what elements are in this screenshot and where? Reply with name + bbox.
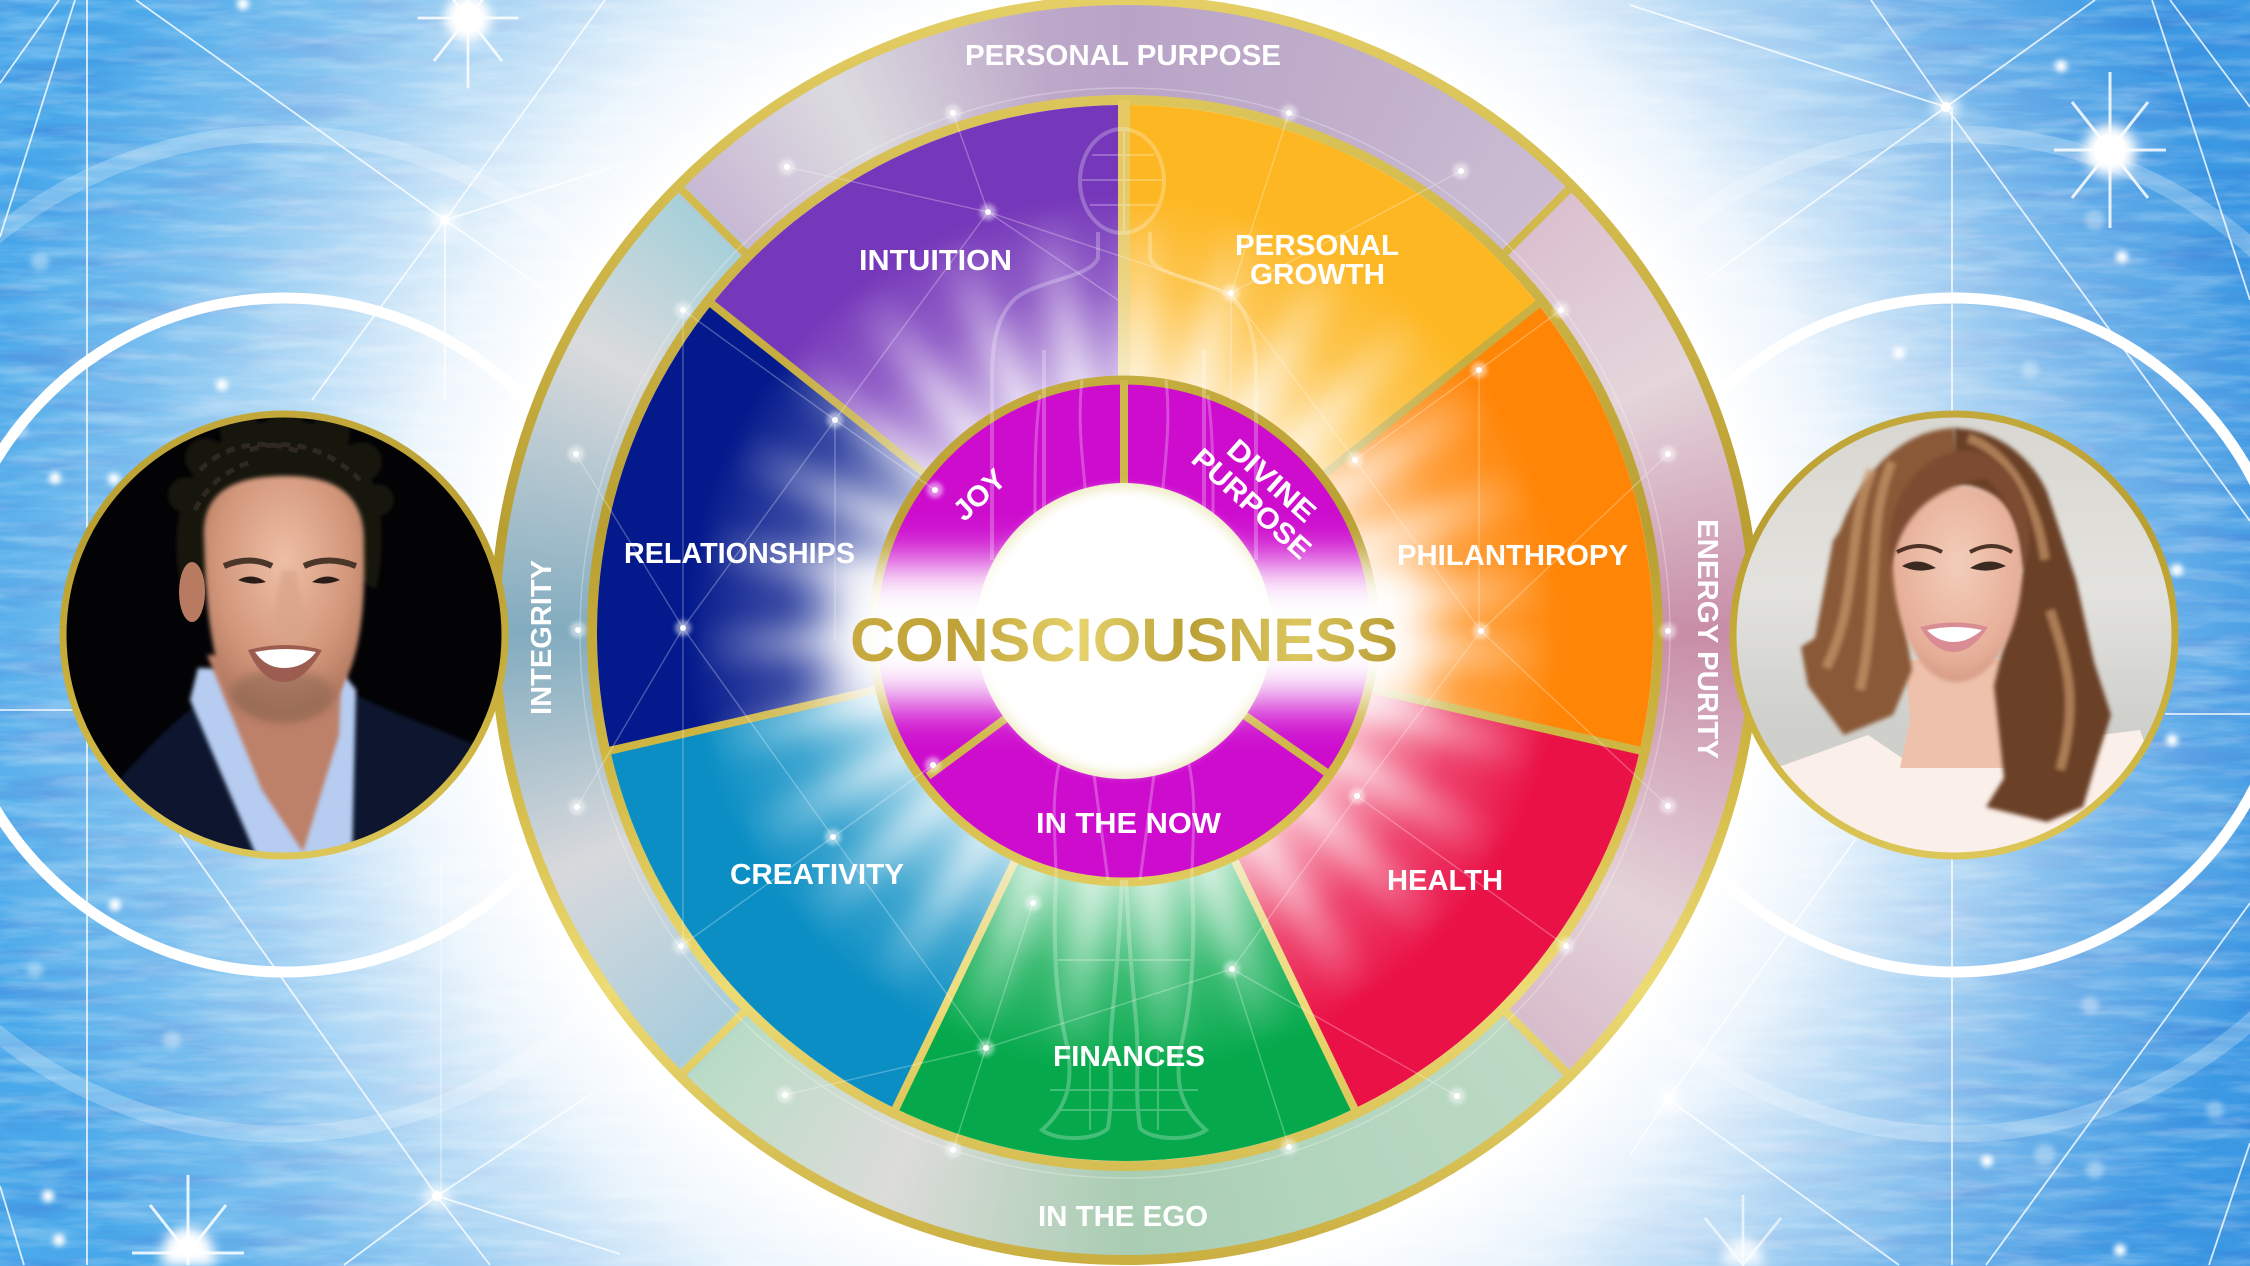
segment: creativity: [610, 633, 1125, 1109]
segment: intuition: [712, 105, 1125, 633]
seven colored segments: [597, 105, 1653, 1161]
label: energy purity: ENERGY PURITY: [1691, 519, 1723, 759]
label: consciousness: CONSCIOUSNESS: [850, 606, 1398, 674]
label: personal purpose: PERSONAL PURPOSE: [965, 40, 1281, 72]
white rings around portraits: [0, 298, 2250, 972]
radiating light streaks: [785, 293, 1465, 973]
label: health: HEALTH: [1387, 865, 1503, 897]
outer ring gold borders and separators: [495, 0, 1755, 1260]
label: in the now: IN THE NOW: [1036, 808, 1222, 840]
label: divine purpose: DIVINE: [1220, 433, 1322, 529]
hair right lobe: [1954, 428, 2111, 822]
nose shade: [278, 570, 298, 604]
stubble: [230, 669, 334, 721]
hair left lobe: [1801, 428, 1960, 735]
pale wide arcs: [0, 134, 2250, 1134]
jacket: [120, 694, 472, 850]
label: finances: FINANCES: [1053, 1041, 1205, 1073]
ear: [179, 562, 205, 622]
wheel gold rim: [592, 100, 1658, 1166]
eyes: [1902, 561, 2006, 571]
bottom right star, cut by page edge: [1723, 1238, 1763, 1266]
label: creativity: CREATIVITY: [730, 859, 904, 891]
constellation overlay on wheel: [568, 88, 1676, 1178]
label: personal growth: [1235, 230, 1399, 291]
brows: [224, 560, 356, 566]
segment: finances: [896, 633, 1354, 1161]
white inner circle: [976, 483, 1272, 779]
label: in the ego: IN THE EGO: [1038, 1201, 1208, 1233]
white light band across center: [835, 563, 1420, 702]
top: [1760, 730, 2190, 870]
hub dividers: [928, 380, 1330, 776]
eyes: [238, 576, 340, 584]
neck: [207, 655, 342, 852]
shirt: [190, 668, 356, 860]
segment dividers: [604, 100, 1646, 1114]
fringe: [1888, 450, 2029, 570]
brows: [1897, 546, 2012, 552]
hair highlights: [1826, 438, 2070, 770]
segment: relationships: [597, 304, 1125, 750]
label: relationships: RELATIONSHIPS: [624, 538, 855, 570]
label: integrity: INTEGRITY: [526, 560, 558, 715]
label: intuition: INTUITION: [859, 245, 1012, 277]
hair texture: [195, 445, 360, 510]
label: philanthropy: PHILANTHROPY: [1397, 540, 1628, 572]
label: personal growth: PERSONAL: [1235, 230, 1399, 262]
portrait: woman: [1730, 410, 2190, 870]
central hub: [873, 129, 1375, 1138]
smile: [248, 645, 322, 682]
bottom left star, cut by page edge: [162, 1227, 214, 1266]
lips and teeth: [1920, 622, 1988, 652]
neck: [1900, 660, 2010, 768]
segment: health: [1125, 633, 1640, 1109]
portrait: man: [60, 406, 510, 870]
label: divine purpose: PURPOSE: [1185, 443, 1317, 566]
label: joy: JOY: [947, 463, 1013, 528]
label: personal growth: GROWTH: [1250, 259, 1385, 291]
face: [204, 476, 364, 724]
segment: personal growth: [1125, 105, 1538, 633]
hair: [168, 406, 394, 590]
body figure outline: [992, 129, 1256, 1138]
outer ring: four colored arcs: [495, 2, 1755, 1262]
face: [1893, 486, 2022, 682]
inner wheel glow: [685, 193, 1565, 1073]
segment: philanthropy: [1125, 304, 1653, 750]
